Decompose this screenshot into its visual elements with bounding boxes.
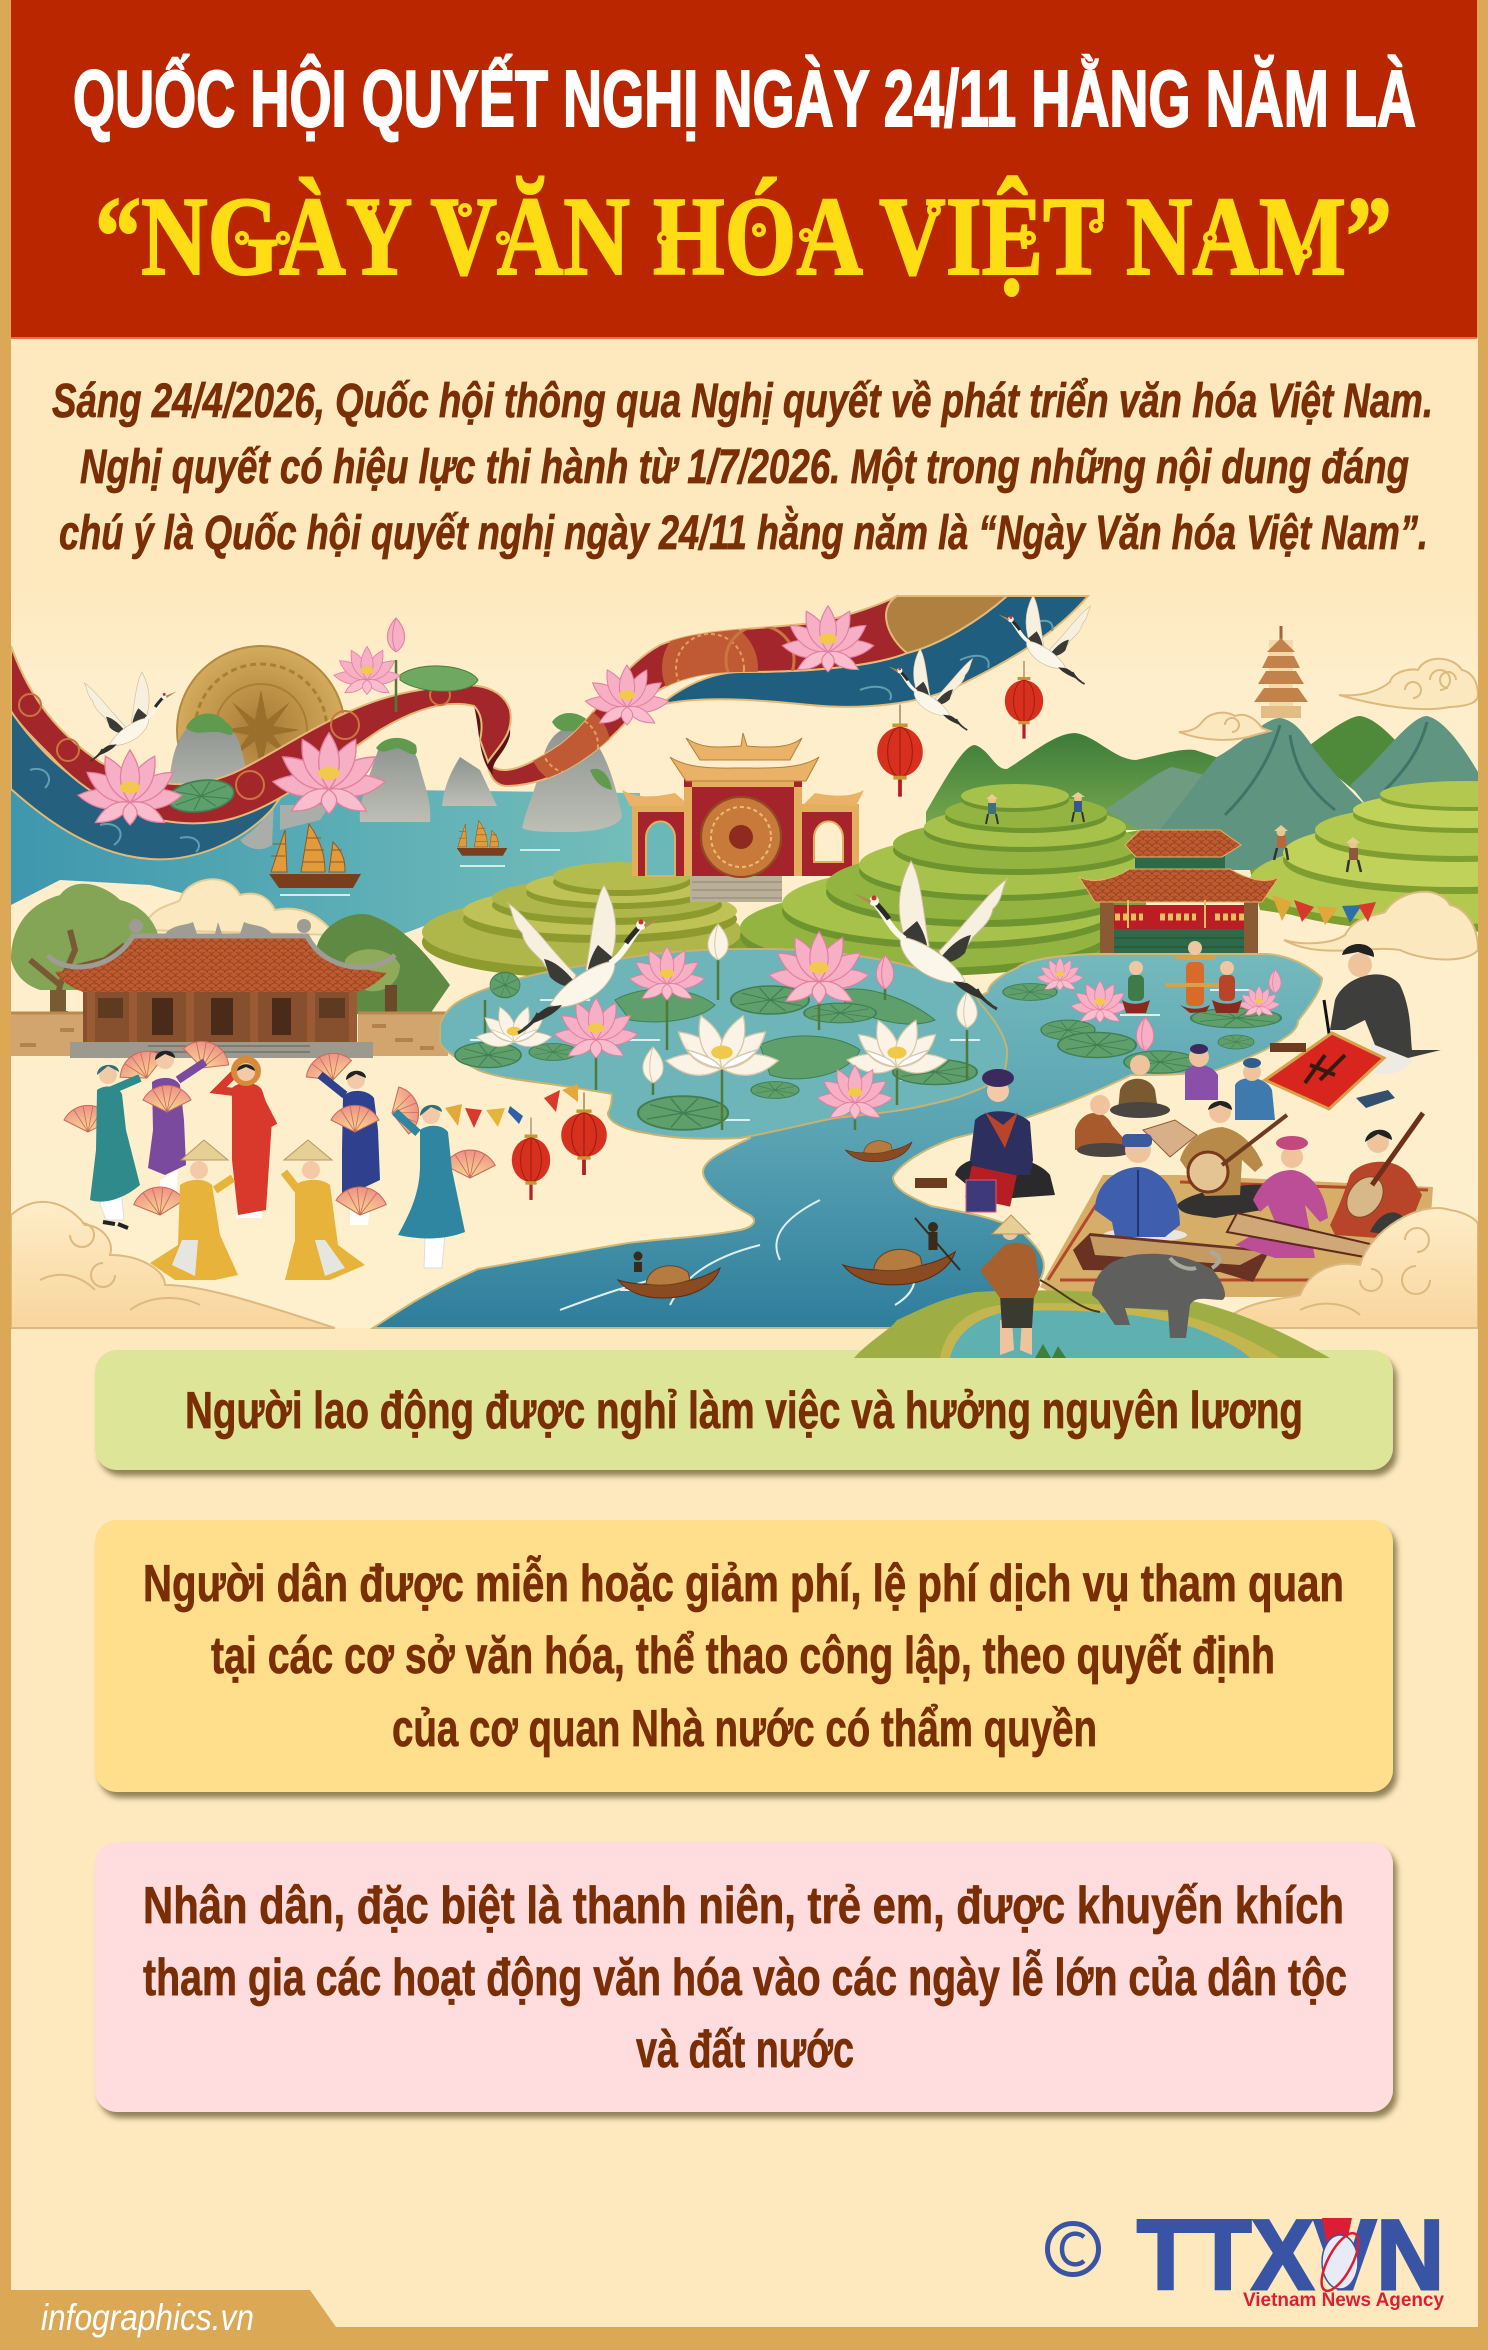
dancer: yellow seated left [132,1140,238,1280]
farmer with buffalo [980,1215,1225,1355]
water puppet pavilion [1078,830,1280,953]
board game group [1075,1044,1275,1157]
dancer: yellow seated right [284,1140,388,1280]
pond and river [373,949,1322,1328]
cloud: bottom left [11,1202,335,1328]
cloud: behind communal house [143,879,335,935]
cloud: top right [1339,659,1478,709]
copyright symbol [1048,2224,1098,2274]
footer bar [0,2327,1488,2350]
footer tab [0,2290,336,2350]
cranes in sky [84,595,1091,761]
card: youth participation: và đất nước [636,2021,854,2079]
dancer: teal ao dai right [387,1084,495,1268]
cloud: by pagoda [1179,713,1270,740]
woman embroidering [915,1069,1055,1212]
card: fee reduction: của cơ quan Nhà nước có thẩm quyền [392,1700,1097,1758]
bunting: left [445,1084,578,1128]
illustration: cultural landscape [11,590,1488,1358]
dancer: blue ao dai man [301,1047,380,1225]
bunting: right [1272,895,1376,925]
card: fee reduction [95,1520,1393,1792]
pagoda [1254,626,1308,718]
lotus flowers on ribbon [77,606,875,829]
calligrapher [1265,944,1441,1109]
intro paragraph [52,375,1433,560]
terraced hill: right [1250,781,1488,932]
logo: TTXVN: Vietnam News Agency [1243,2290,1444,2311]
cloud: bottom right [1217,1208,1478,1328]
dancer: teal ao dai left [63,1050,158,1230]
dancer: purple ao dai [143,1035,234,1196]
hanging lanterns [877,661,1043,797]
small farmers on terraces [986,792,1361,872]
terraced hill: left [422,862,742,978]
musicians on mat [1040,1101,1433,1297]
bronze drum medallion [176,645,344,766]
trees [11,884,450,1018]
large cranes [508,861,1007,1033]
cloud: right middle [1284,892,1478,959]
river boats [618,1141,960,1298]
communal house [11,919,448,1058]
ribbon [11,596,1088,859]
left pond lilies and lotus [455,924,977,1130]
temple gate [622,733,864,902]
bay water [11,785,640,935]
right pond lotus [1003,957,1281,1073]
karst rocks [168,713,622,849]
bottom rice terrace [854,1290,1330,1358]
logo: TTXVN: TTXVN [1137,2199,1444,2310]
water puppets [1122,941,1242,1013]
card: paid leave [95,1350,1393,1470]
dancer: red ao dai [218,1056,272,1218]
terraced hill: centre [732,784,1150,976]
footer tab: infographics.vn [41,2297,254,2338]
title banner [11,0,1477,339]
card: youth participation [95,1842,1393,2112]
junk boats [269,820,560,895]
mountains [926,716,1478,870]
lanterns: lower left [512,1092,607,1200]
